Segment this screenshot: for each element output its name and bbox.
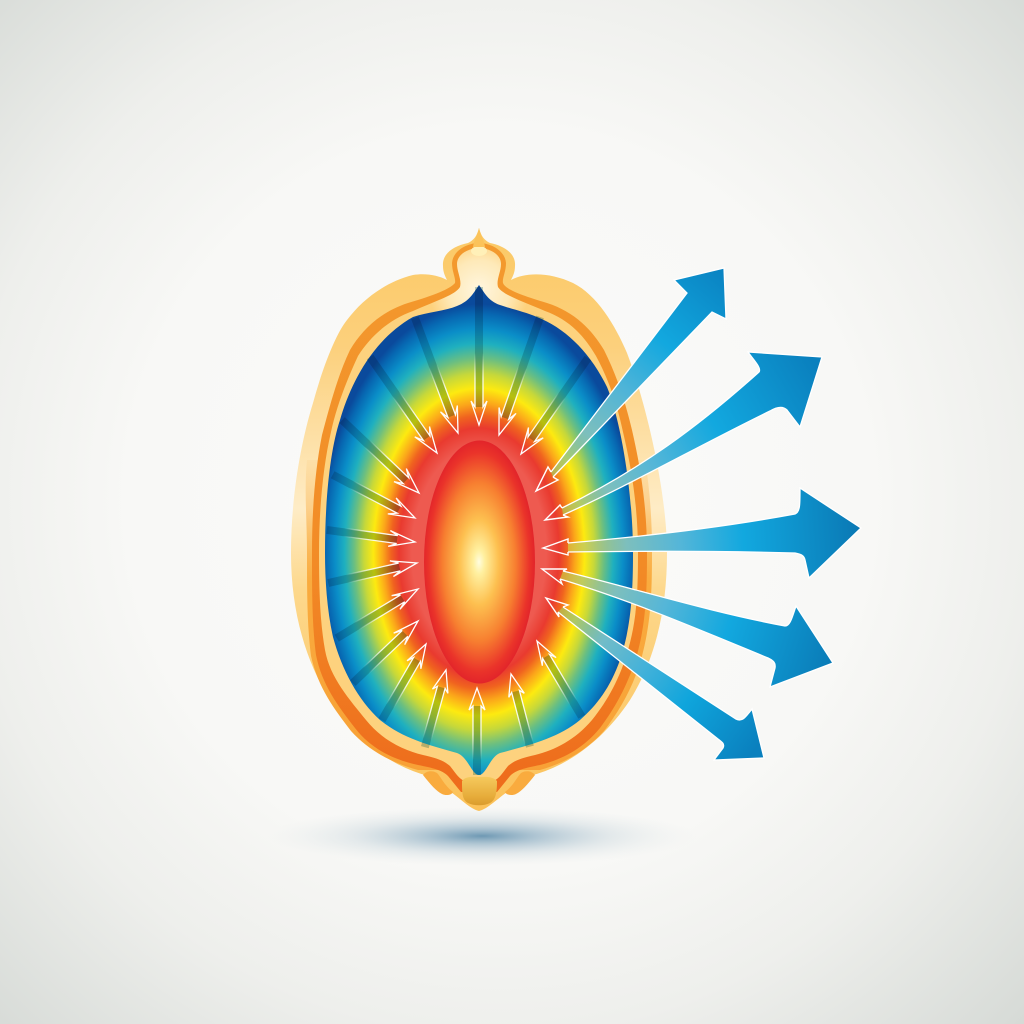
inward arrows xyxy=(326,287,595,775)
right bottom lobe xyxy=(505,771,535,795)
arrow C: right xyxy=(543,488,861,578)
arrow 6 xyxy=(336,414,425,500)
arrow 5 xyxy=(514,353,595,459)
arrow 10 xyxy=(333,582,422,645)
outer golden shell xyxy=(291,228,667,811)
arrow 9 xyxy=(326,555,419,591)
left bottom lobe xyxy=(423,771,453,795)
gradient field xyxy=(325,285,633,775)
bottom cup xyxy=(462,777,497,805)
orange membrane xyxy=(312,243,647,792)
arrow B: right upper xyxy=(545,352,822,520)
arrow 3 xyxy=(491,314,549,438)
secondary amber band xyxy=(306,460,652,770)
arrow 16 xyxy=(530,637,589,721)
outward blue arrows xyxy=(536,268,861,760)
hot core xyxy=(424,440,535,684)
arrow 2 xyxy=(406,315,466,436)
arrow 13 xyxy=(417,668,454,749)
arrow A: upper right xyxy=(536,268,726,491)
top knob highlight xyxy=(471,246,487,256)
arrow 8 xyxy=(326,522,416,550)
diagram: layered cell body xyxy=(291,228,667,811)
arrow 7 xyxy=(328,467,419,526)
arrow 11 xyxy=(347,615,424,689)
arrow E: lower right xyxy=(546,598,764,760)
arrow 1 xyxy=(471,287,487,425)
arrow 12 xyxy=(375,640,433,724)
arrow 15 xyxy=(503,672,538,749)
arrow 4 xyxy=(363,352,444,458)
arrow D: right lower xyxy=(542,569,833,687)
ground shadow xyxy=(267,806,697,866)
arrow 14 xyxy=(469,688,485,775)
top spike xyxy=(473,228,485,247)
cream interior xyxy=(319,248,638,784)
